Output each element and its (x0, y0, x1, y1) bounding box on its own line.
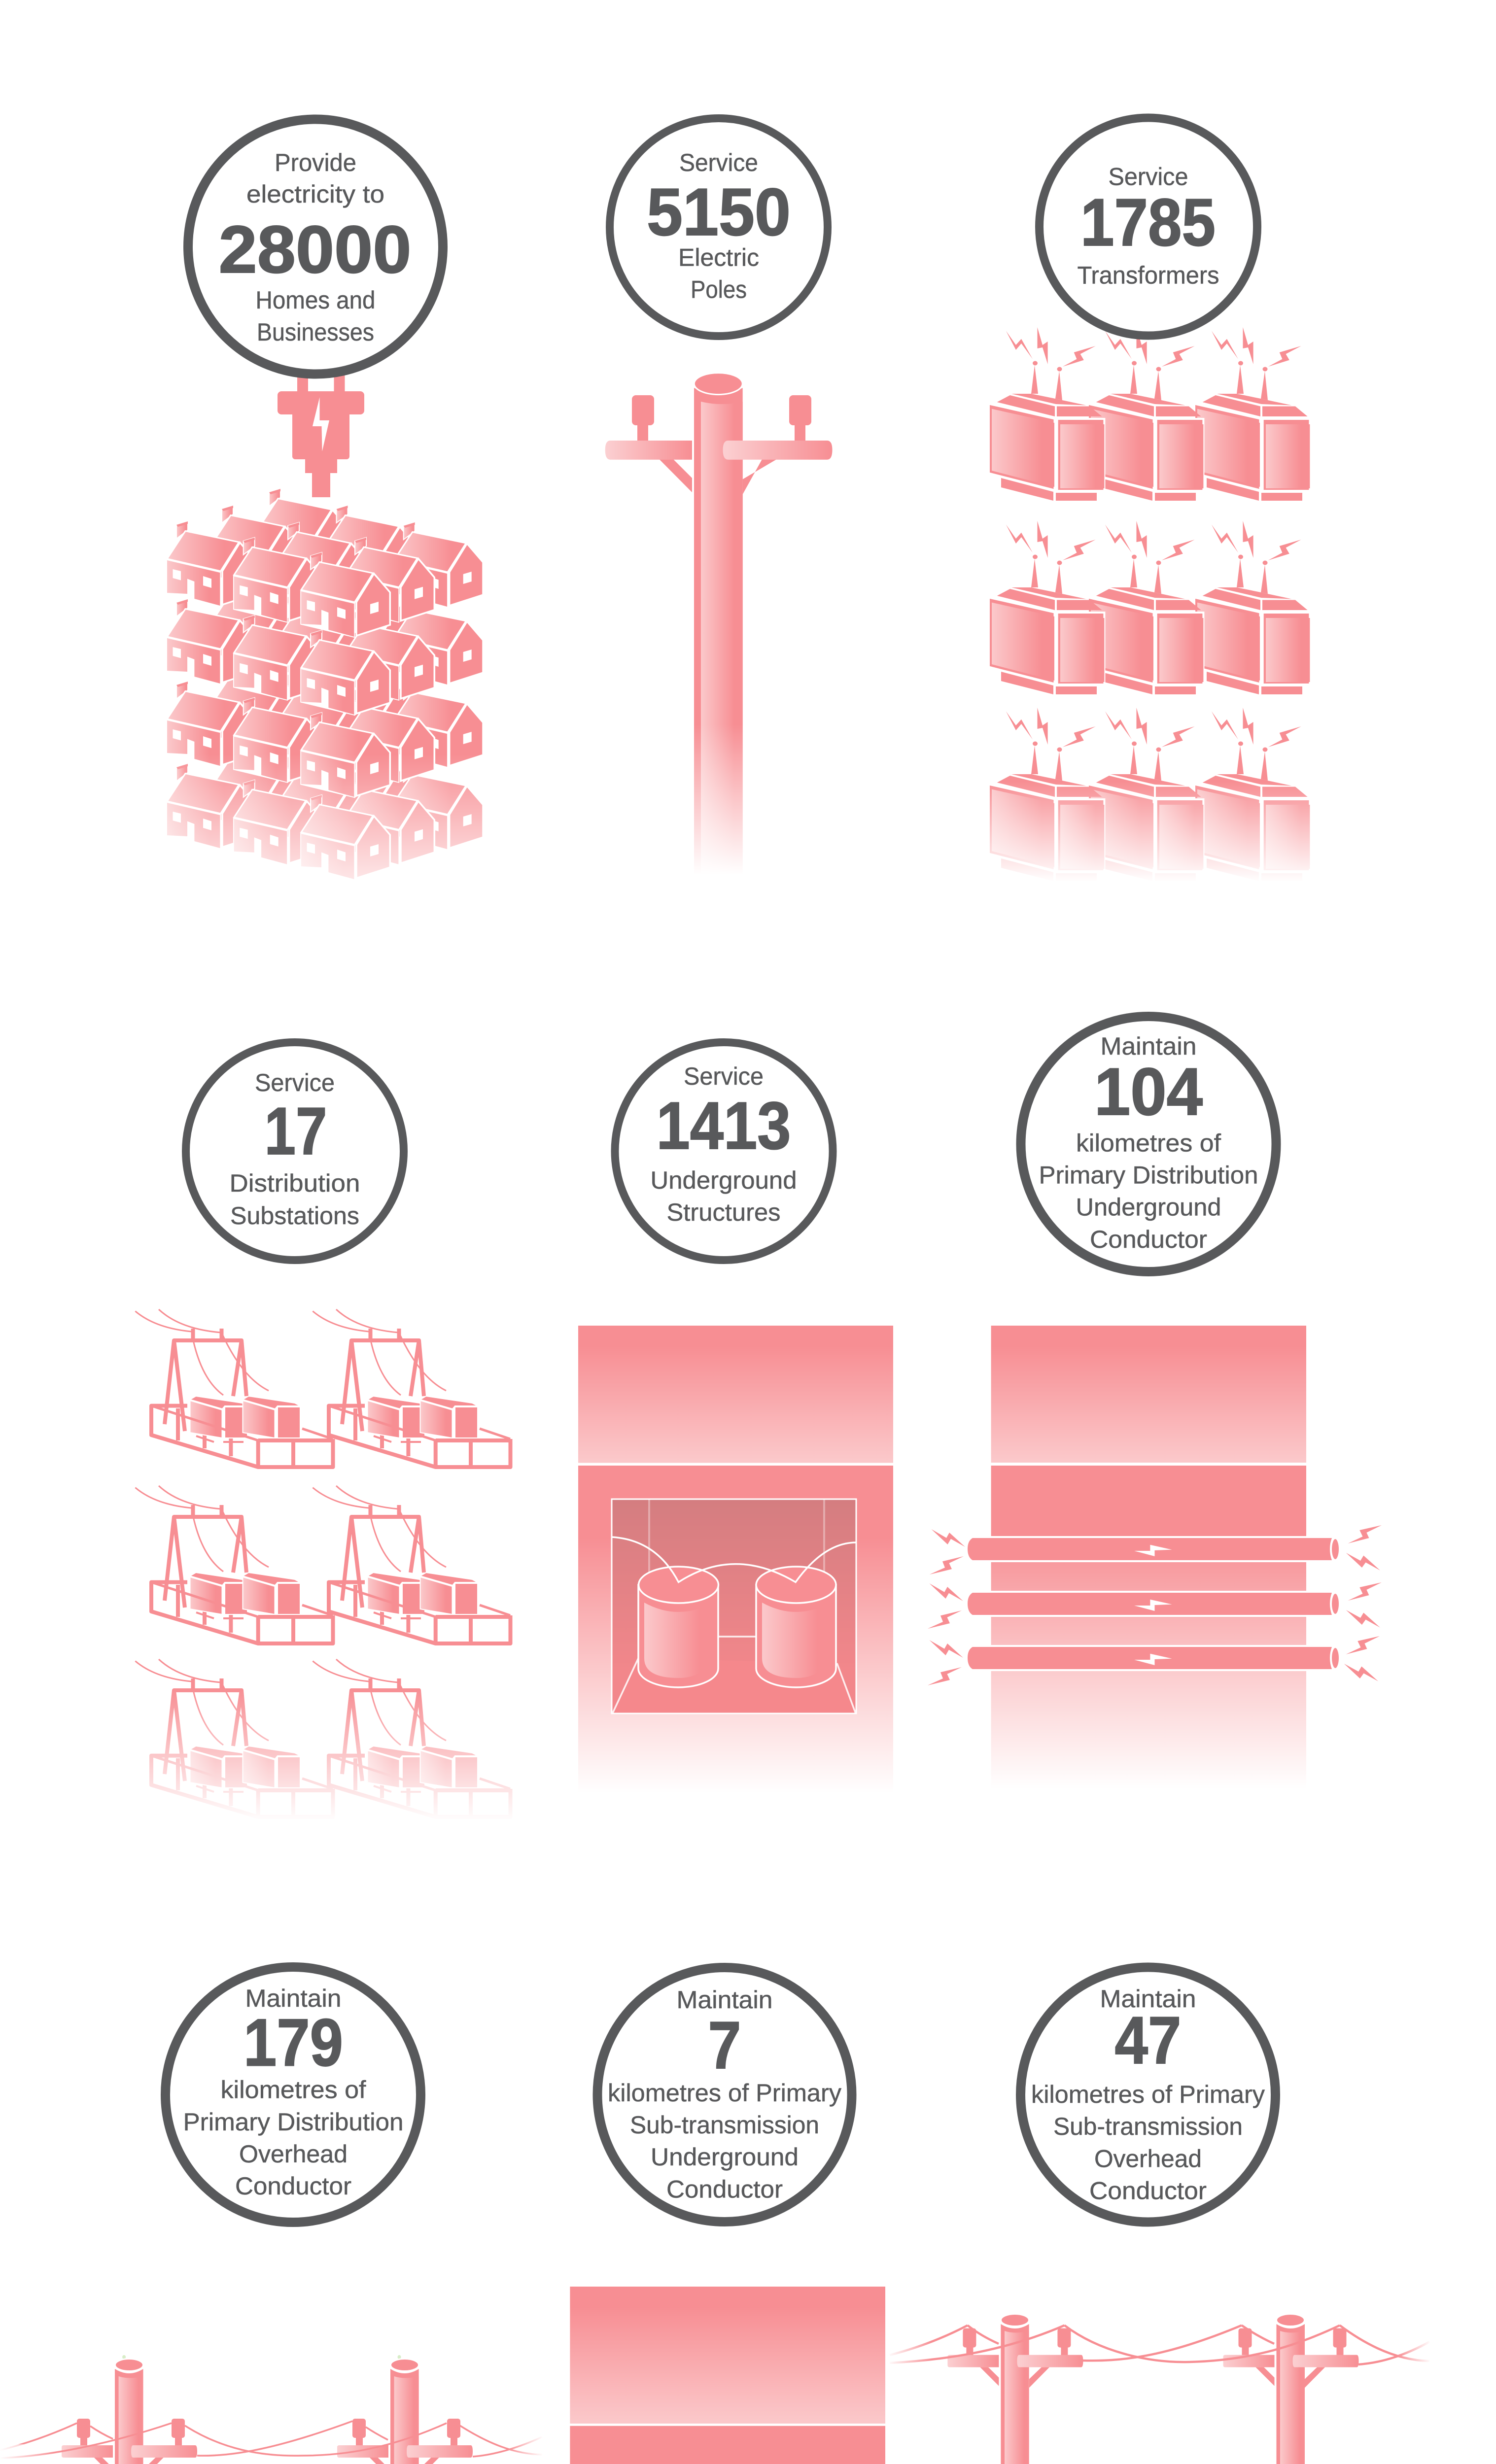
badge: 47 km sub-transmission overhead (1020, 1967, 1276, 2222)
badge: 1413 underground structures: Underground (651, 1166, 797, 1194)
badge: 47 km sub-transmission overhead: Conductor (1089, 2177, 1207, 2205)
badge: 179 km primary distribution overhead: Maintain (245, 1985, 341, 2012)
badge: 1785 transformers: 1785 (1080, 185, 1216, 260)
badge: 5150 electric poles: Service (679, 149, 758, 176)
icon: overhead poles and wires (0, 2355, 543, 2464)
badge: 28000 homes and businesses: Homes and (255, 286, 376, 314)
panel: primary sub-transmission overhead conductor (887, 1967, 1431, 2464)
badge: 1785 transformers (1039, 118, 1257, 336)
badge: 7 km sub-transmission underground: Maintain (676, 1986, 773, 2014)
icon: underground vault (578, 1326, 893, 1793)
badge: 5150 electric poles: Poles (691, 276, 747, 304)
badge: 28000 homes and businesses: 28000 (219, 212, 411, 287)
panel: underground structures (578, 1042, 893, 1793)
badge: 17 distribution substations: Substations (230, 1202, 359, 1230)
icon: substation grid (128, 1309, 518, 1822)
badge: 104 km primary distribution underground: Conductor (1090, 1226, 1207, 1253)
icon: sub-transmission underground conductors (487, 2287, 974, 2464)
icon: plug (278, 365, 364, 497)
badge: 17 distribution substations: 17 (264, 1094, 327, 1168)
badge: 47 km sub-transmission overhead: Overhead (1094, 2145, 1202, 2172)
badge: 179 km primary distribution overhead: Conductor (235, 2172, 351, 2200)
badge: 104 km primary distribution underground: Underground (1076, 1194, 1221, 1221)
badge: 179 km primary distribution overhead: kilometres of (221, 2076, 366, 2103)
badge: 7 km sub-transmission underground: Conductor (666, 2175, 783, 2203)
badge: 47 km sub-transmission overhead: 47 (1115, 2003, 1181, 2078)
icon: transformer grid (986, 327, 1321, 882)
badge: 17 distribution substations (186, 1042, 404, 1260)
badge: 17 distribution substations: Service (255, 1069, 335, 1096)
panel: primary distribution underground conductor (928, 1016, 1382, 1789)
badge: 7 km sub-transmission underground: Sub-transmission (630, 2111, 819, 2139)
badge: 1413 underground structures: Service (684, 1062, 764, 1090)
badge: 28000 homes and businesses: Businesses (257, 318, 374, 346)
badge: 104 km primary distribution underground: Maintain (1100, 1032, 1197, 1060)
panel: transformers (986, 118, 1321, 882)
badge: 28000 homes and businesses: electricity to (246, 180, 384, 208)
icon: underground conductors (928, 1326, 1382, 1789)
icon: stacked houses (158, 489, 493, 883)
badge: 1413 underground structures (615, 1042, 833, 1260)
panel: primary sub-transmission underground conductor (487, 1967, 974, 2464)
badge: 1413 underground structures: 1413 (657, 1088, 791, 1163)
badge: 17 distribution substations: Distribution (230, 1169, 360, 1197)
badge: 7 km sub-transmission underground: Underground (651, 2143, 799, 2171)
badge: 1785 transformers: Service (1108, 163, 1188, 190)
badge: 179 km primary distribution overhead: 179 (244, 2005, 343, 2080)
badge: 1785 transformers: Transformers (1078, 261, 1219, 289)
badge: 104 km primary distribution underground: Primary Distribution (1039, 1161, 1258, 1189)
badge: 47 km sub-transmission overhead: Maintain (1100, 1985, 1196, 2013)
badge: 7 km sub-transmission underground (597, 1967, 852, 2222)
panel: homes and businesses (158, 119, 493, 883)
badge: 7 km sub-transmission underground: kilometres of Primary (608, 2079, 841, 2107)
badge: 104 km primary distribution underground: 104 (1094, 1054, 1203, 1129)
icon: sub-transmission poles and wires (887, 2314, 1431, 2464)
badge: 28000 homes and businesses (188, 119, 443, 374)
badge: 179 km primary distribution overhead: Overhead (239, 2140, 348, 2168)
badge: 104 km primary distribution underground: kilometres of (1076, 1129, 1221, 1157)
panel: electric poles (605, 118, 832, 875)
badge: 7 km sub-transmission underground: 7 (708, 2008, 741, 2083)
badge: 5150 electric poles: Electric (678, 243, 759, 271)
badge: 179 km primary distribution overhead: Primary Distribution (183, 2108, 403, 2136)
badge: 1413 underground structures: Structures (666, 1198, 781, 1226)
panel: distribution substations (128, 1042, 518, 1822)
icon: large electric pole (605, 373, 832, 875)
panel: primary distribution overhead conductor (0, 1967, 543, 2464)
badge: 47 km sub-transmission overhead: Sub-transmission (1053, 2113, 1243, 2140)
badge: 5150 electric poles: 5150 (647, 174, 791, 249)
badge: 5150 electric poles (610, 118, 828, 336)
badge: 28000 homes and businesses: Provide (275, 149, 356, 176)
badge: 179 km primary distribution overhead (166, 1967, 421, 2223)
badge: 47 km sub-transmission overhead: kilometres of Primary (1031, 2081, 1265, 2108)
badge: 104 km primary distribution underground (1021, 1016, 1276, 1271)
